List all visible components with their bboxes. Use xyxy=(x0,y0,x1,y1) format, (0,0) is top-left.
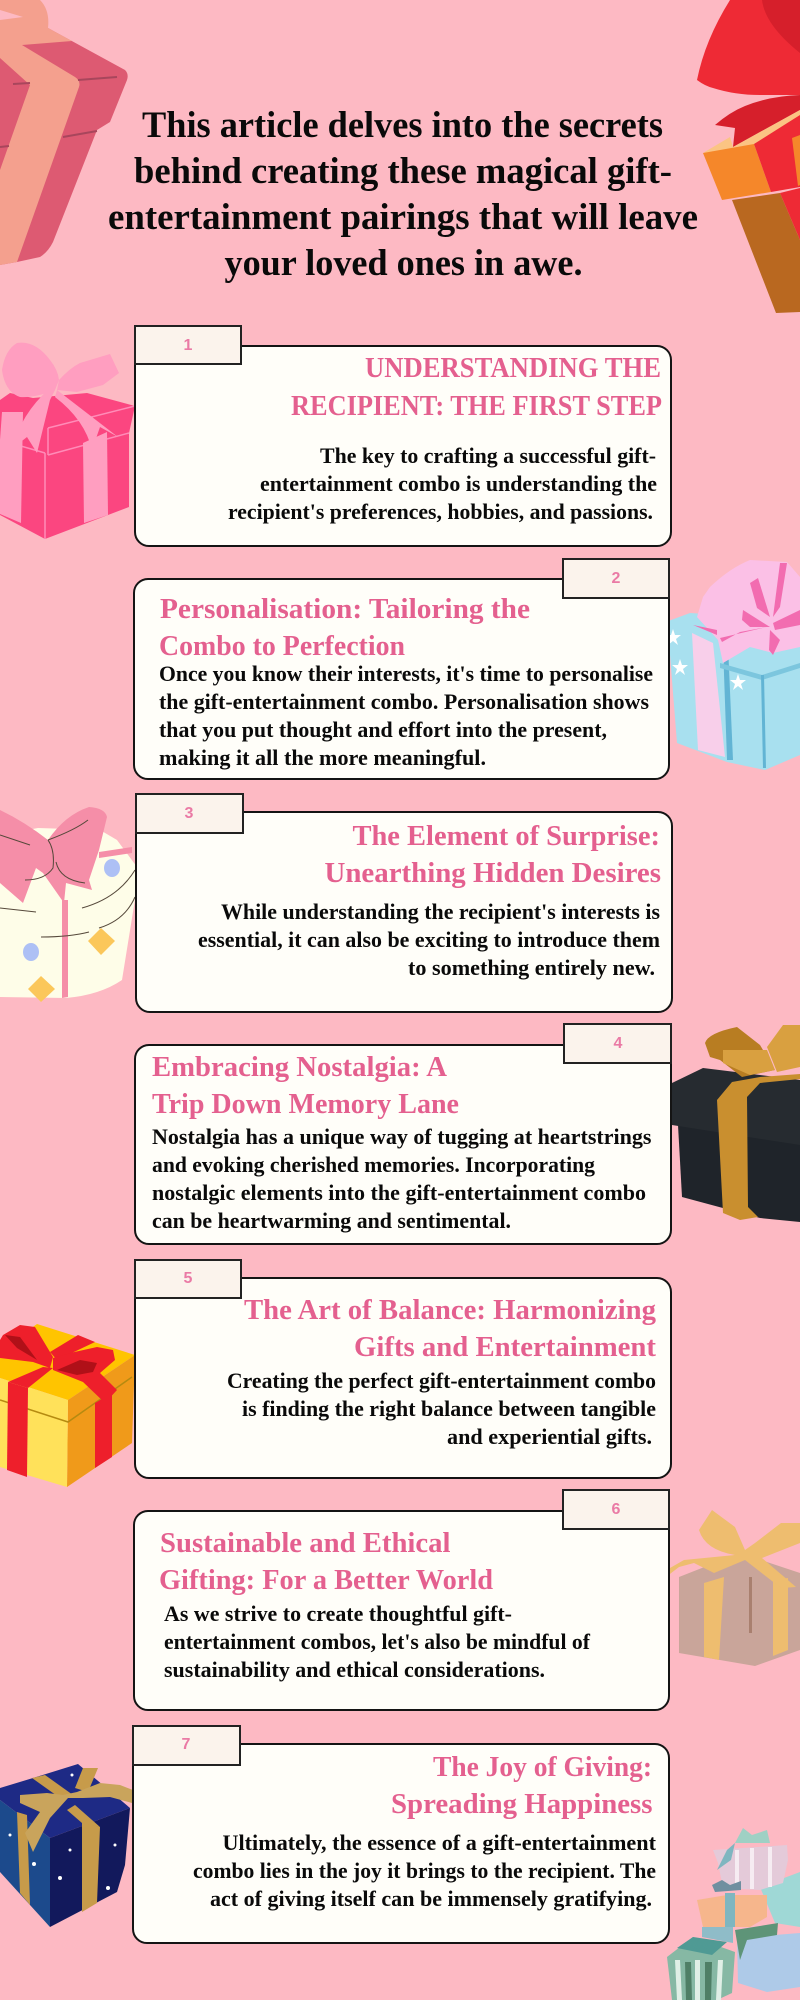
body text xyxy=(228,443,657,524)
heading: Personalisation: Tailoring the xyxy=(160,593,530,625)
body text: act of giving itself can be immensely gratifying. xyxy=(210,1886,652,1911)
body text: Nostalgia has a unique way of tugging at heartstrings xyxy=(152,1124,652,1149)
heading xyxy=(291,352,662,422)
panel: card 6 xyxy=(134,1490,669,1710)
tab: number 2: 2 xyxy=(612,570,621,587)
heading: The Joy of Giving: xyxy=(433,1751,652,1783)
body text: combo lies in the joy it brings to the recipient. The xyxy=(193,1858,656,1883)
icon: coral gift top left xyxy=(0,0,128,265)
body text xyxy=(198,899,660,980)
tab: number 1 xyxy=(135,326,241,364)
icon: yellow gift with red ribbon xyxy=(0,1324,135,1487)
body text: While understanding the recipient's interests is xyxy=(221,899,660,924)
heading: UNDERSTANDING THE xyxy=(365,352,661,384)
body text: that you put thought and effort into the present, xyxy=(159,717,607,742)
body text: The key to crafting a successful gift- xyxy=(320,443,656,468)
tab: number 6: 6 xyxy=(612,1501,621,1518)
body text: and evoking cherished memories. Incorporating xyxy=(152,1152,595,1177)
tab: number 5: 5 xyxy=(184,1270,193,1287)
tab: number 2 xyxy=(563,559,669,598)
body text: can be heartwarming and sentimental. xyxy=(152,1208,511,1233)
tab: number 1: 1 xyxy=(184,337,193,354)
icon: round cream gift xyxy=(0,807,137,1002)
body text: nostalgic elements into the gift-entertainment combo xyxy=(152,1180,646,1205)
body text: entertainment combo is understanding the xyxy=(260,471,657,496)
tab: number 3 xyxy=(136,794,243,833)
heading: Embracing Nostalgia: A xyxy=(152,1051,447,1083)
panel: card 3 xyxy=(136,794,672,1012)
icon: pink gift xyxy=(0,343,135,539)
body text xyxy=(164,1601,591,1682)
panel: card 2 xyxy=(134,559,669,779)
icon: blue and pink gift xyxy=(663,560,800,770)
heading xyxy=(152,1051,459,1120)
heading: Spreading Happiness xyxy=(391,1788,652,1820)
body text: entertainment combos, let's also be mindful of xyxy=(164,1629,591,1654)
heading xyxy=(159,1527,493,1596)
body text: and experiential gifts. xyxy=(447,1424,652,1449)
tab: number 6 xyxy=(563,1490,669,1529)
icon: black gift with gold ribbon xyxy=(672,1025,800,1222)
panel: card 4 xyxy=(135,1024,671,1244)
heading: Combo to Perfection xyxy=(159,630,405,662)
body text xyxy=(193,1830,657,1911)
title: entertainment pairings that will leave xyxy=(108,197,698,238)
panel: card 5 xyxy=(135,1260,671,1478)
body text: the gift-entertainment combo. Personalisation shows xyxy=(159,689,649,714)
body text: recipient's preferences, hobbies, and passions. xyxy=(228,499,653,524)
tab: number 4: 4 xyxy=(614,1035,623,1052)
heading: Gifts and Entertainment xyxy=(354,1331,656,1363)
icon: stacked pastel gifts xyxy=(667,1828,800,2000)
tab: number 7 xyxy=(133,1726,240,1765)
body text: Once you know their interests, it's time to personalise xyxy=(159,661,653,686)
body text: Creating the perfect gift-entertainment combo xyxy=(227,1368,656,1393)
icon: red and orange gift top right xyxy=(697,0,800,313)
body text: is finding the right balance between tangible xyxy=(242,1396,656,1421)
heading: RECIPIENT: THE FIRST STEP xyxy=(291,390,662,422)
body text: sustainability and ethical considerations. xyxy=(164,1657,545,1682)
heading: The Element of Surprise: xyxy=(352,820,660,852)
body text: making it all the more meaningful. xyxy=(159,745,486,770)
heading xyxy=(159,593,530,662)
heading: Gifting: For a Better World xyxy=(159,1564,493,1596)
body text xyxy=(159,661,653,770)
tab: number 4 xyxy=(564,1024,671,1063)
heading xyxy=(391,1751,652,1820)
heading: Sustainable and Ethical xyxy=(160,1527,450,1559)
title: your loved ones in awe. xyxy=(224,243,582,284)
heading xyxy=(324,820,661,889)
panel: card 1 xyxy=(135,326,671,546)
heading: The Art of Balance: Harmonizing xyxy=(244,1294,656,1326)
tab: number 3: 3 xyxy=(185,805,194,822)
body text: Ultimately, the essence of a gift-entertainment xyxy=(222,1830,657,1855)
body text: As we strive to create thoughtful gift- xyxy=(164,1601,512,1626)
tab: number 7: 7 xyxy=(182,1736,191,1753)
body text: to something entirely new. xyxy=(408,955,655,980)
heading xyxy=(244,1294,656,1363)
title: This article delves into the secrets xyxy=(142,105,663,146)
body text xyxy=(227,1368,656,1449)
title: behind creating these magical gift- xyxy=(134,151,672,192)
body text xyxy=(152,1124,652,1233)
tab: number 5 xyxy=(135,1260,241,1298)
icon: tan gift with gold bow xyxy=(663,1510,800,1666)
body text: essential, it can also be exciting to introduce them xyxy=(198,927,660,952)
panel: card 7 xyxy=(133,1726,669,1943)
icon: navy starry gift xyxy=(0,1764,133,1927)
heading: Trip Down Memory Lane xyxy=(152,1088,459,1120)
heading: Unearthing Hidden Desires xyxy=(324,857,661,889)
title xyxy=(108,105,698,284)
